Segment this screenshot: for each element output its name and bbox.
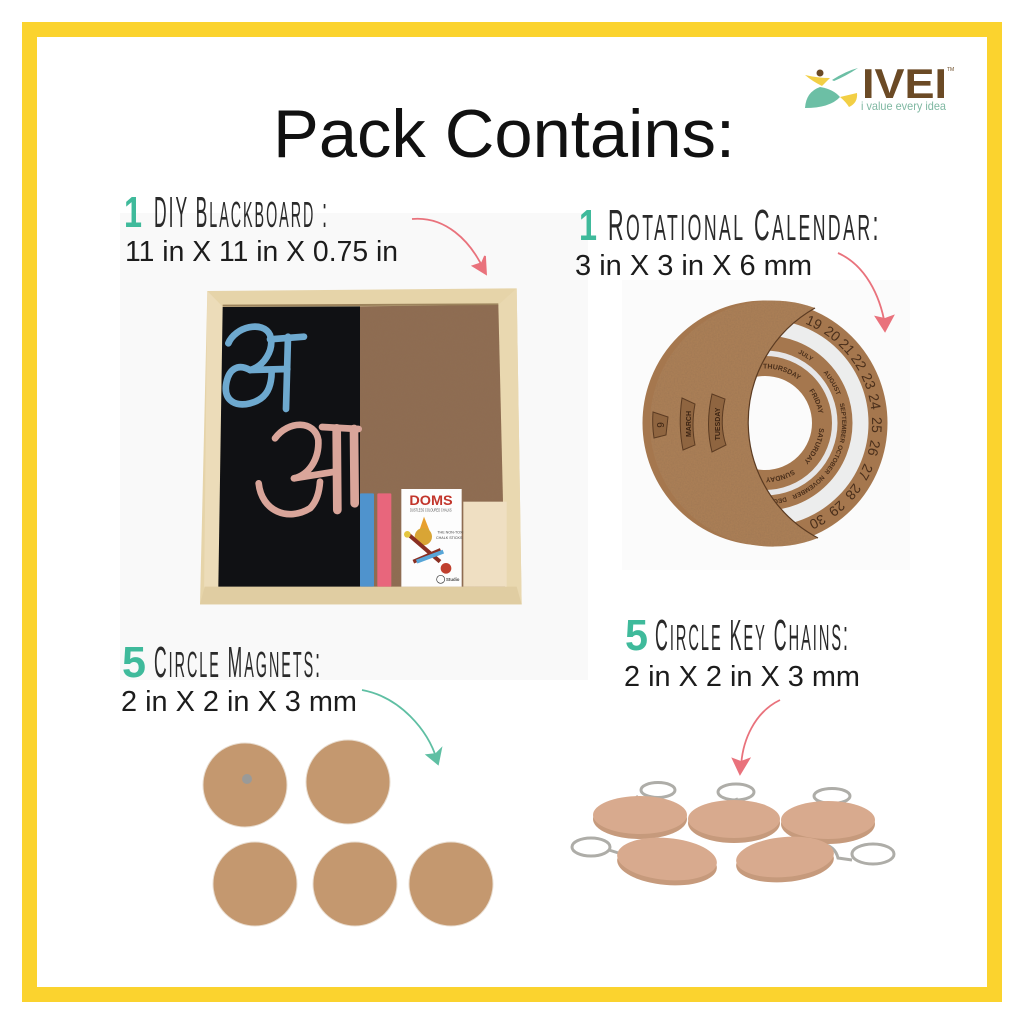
calendar photo [642,300,888,547]
photo panel: calendar background [622,280,910,570]
crescent inner edge [748,308,818,538]
date numbers: 19 [806,316,822,329]
day names: SATURDAY [805,428,824,464]
wooden eraser block [463,502,507,587]
chalk box: Studio [446,577,460,582]
metal rings [572,782,894,864]
heading: calendar [579,201,881,250]
heading: key chains: 5 [625,611,648,660]
crescent cover [650,301,818,547]
dimensions: key chains: 2 in X 2 in X 3 mm [624,661,860,693]
title: Pack Contains: [273,96,735,172]
heading: magnets: CIRCLE MAGNETS: [154,638,322,687]
date numbers: 30 [810,515,826,528]
month names: AUGUST [824,371,841,394]
logo: IVEI: i value every idea [861,99,946,113]
key chains [572,782,894,889]
heading: blackboard: 1 [124,188,142,237]
chalk box [401,489,466,587]
date numbers: 22 [850,354,866,371]
arrow: key chains [733,700,780,774]
month names: SEPTEMBER [840,403,846,443]
logo: IVEI [805,60,954,113]
date numbers: 25 [872,418,882,432]
window: weekday: TUESDAY [715,407,722,440]
magnet dot [242,774,252,784]
dimensions: blackboard: 11 in X 11 in X 0.75 in [125,236,398,268]
date numbers [806,316,882,528]
window: weekday [708,394,726,452]
date, month and day rings [652,310,878,536]
chalk box: THE NON-TOXIC [437,530,466,534]
chalk box: DOMS [409,492,453,508]
magnets [203,740,493,926]
date numbers: 21 [838,339,854,356]
day names: SUNDAY [766,470,795,482]
date numbers: 24 [868,394,880,410]
blue chalk stick [360,493,374,587]
logo: IVEI: IVEI [862,60,947,107]
key chain discs [593,796,875,889]
pink chalk stick [377,493,391,587]
date numbers: 27 [860,464,872,480]
wooden frame [200,288,522,604]
dimensions: calendar: 3 in X 3 in X 6 mm [575,250,812,282]
heading: magnets [122,638,322,687]
date numbers: 28 [846,483,860,500]
arrow: calendar [838,253,893,331]
heading: calendar: ROTATIONAL CALENDAR: [608,201,881,250]
arrow: blackboard [412,219,486,274]
day names: THURSDAY [763,364,802,379]
dimensions: magnets: 2 in X 2 in X 3 mm [121,686,357,718]
heading: blackboard: DIY BLACKBOARD : [154,188,329,237]
date numbers: 20 [824,326,840,341]
chalk box: CHALK STICKS [436,536,463,540]
date numbers: 23 [862,373,876,389]
heading: magnets: 5 [122,638,146,687]
month names: NOVEMBER [792,475,825,499]
photo panel: blackboard background [120,213,588,680]
heading: key chains [625,611,850,660]
date numbers: 26 [868,440,880,456]
window: month: MARCH [686,411,693,437]
chalk box: DUSTLESS COLOURED CHALKS [410,508,452,514]
window: month [680,398,695,450]
heading: blackboard [124,188,329,237]
window: date: 9 [656,422,667,428]
day names [763,364,824,482]
logo: IVEI: TM [947,67,954,73]
chalk drawing: pink letter [259,425,359,514]
chalkboard half [218,306,360,587]
day names: FRIDAY [809,388,824,413]
month names: JULY [798,350,814,360]
heading: calendar: 1 [579,201,597,250]
arrow: magnets [362,690,441,764]
month names: DEC [774,497,787,504]
chalk drawing: blue letter [226,327,304,409]
month names [774,350,846,504]
month names: OCTOBER [824,445,842,474]
blackboard photo [200,288,522,604]
window: date [653,412,668,438]
cork half [360,305,505,587]
heading: key chains: CIRCLE KEY CHAINS: [655,611,850,660]
date numbers: 29 [830,500,844,516]
